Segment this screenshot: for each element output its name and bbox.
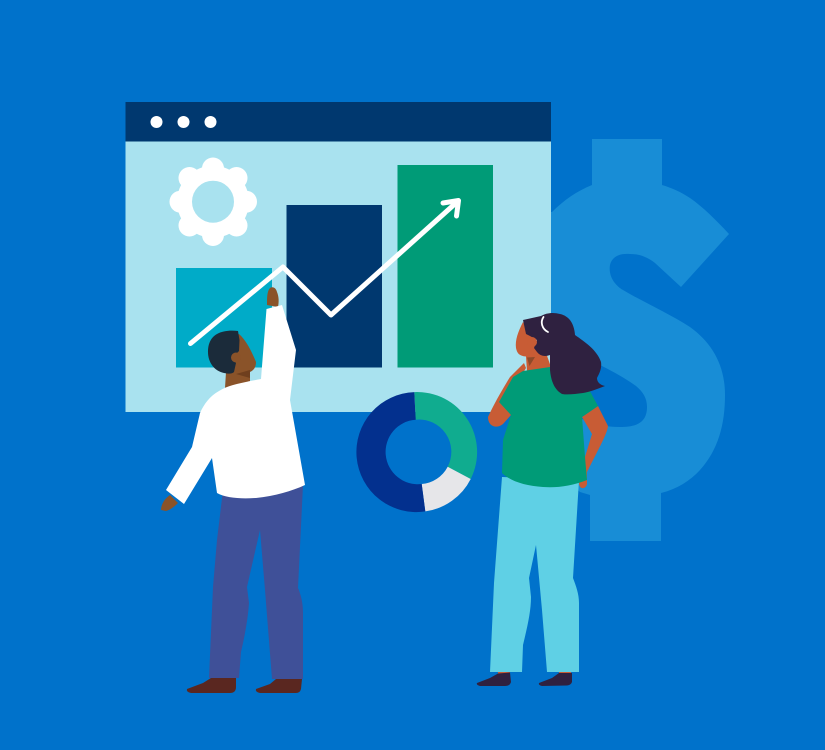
- arrow: rising trend line: [190, 200, 458, 344]
- man neck and face: [225, 334, 256, 388]
- figure: man pointing at chart: [161, 287, 305, 693]
- man trousers: [209, 485, 303, 679]
- icon: gear: [170, 158, 257, 246]
- woman right shoe: [539, 673, 572, 686]
- man hair: [208, 331, 240, 374]
- icon: background dollar sign: [530, 139, 729, 541]
- woman shirt: [499, 367, 598, 487]
- panel: browser window: [126, 102, 551, 412]
- window body: [126, 141, 551, 412]
- man left shoe: [187, 678, 236, 693]
- woman ear: [527, 337, 537, 347]
- woman neck and face: [516, 322, 552, 371]
- man right shoe: [256, 679, 302, 693]
- woman headband: [542, 317, 548, 332]
- woman ankles: [498, 672, 571, 675]
- man raised hand: [267, 287, 279, 307]
- window title bar: [126, 102, 551, 142]
- woman right arm: [579, 406, 608, 488]
- figure: woman looking at chart: [477, 313, 608, 686]
- woman neck shadow: [527, 357, 535, 366]
- man left hand: [161, 495, 178, 511]
- woman left shoe: [477, 672, 511, 686]
- man neck shadow: [236, 370, 250, 378]
- chart: donut: [356, 392, 477, 512]
- woman trousers: [490, 477, 579, 672]
- woman hair: [523, 313, 605, 394]
- man ear: [231, 352, 241, 362]
- bar chart: [176, 165, 493, 368]
- woman raised arm: [488, 363, 526, 427]
- man shirt: [166, 305, 305, 504]
